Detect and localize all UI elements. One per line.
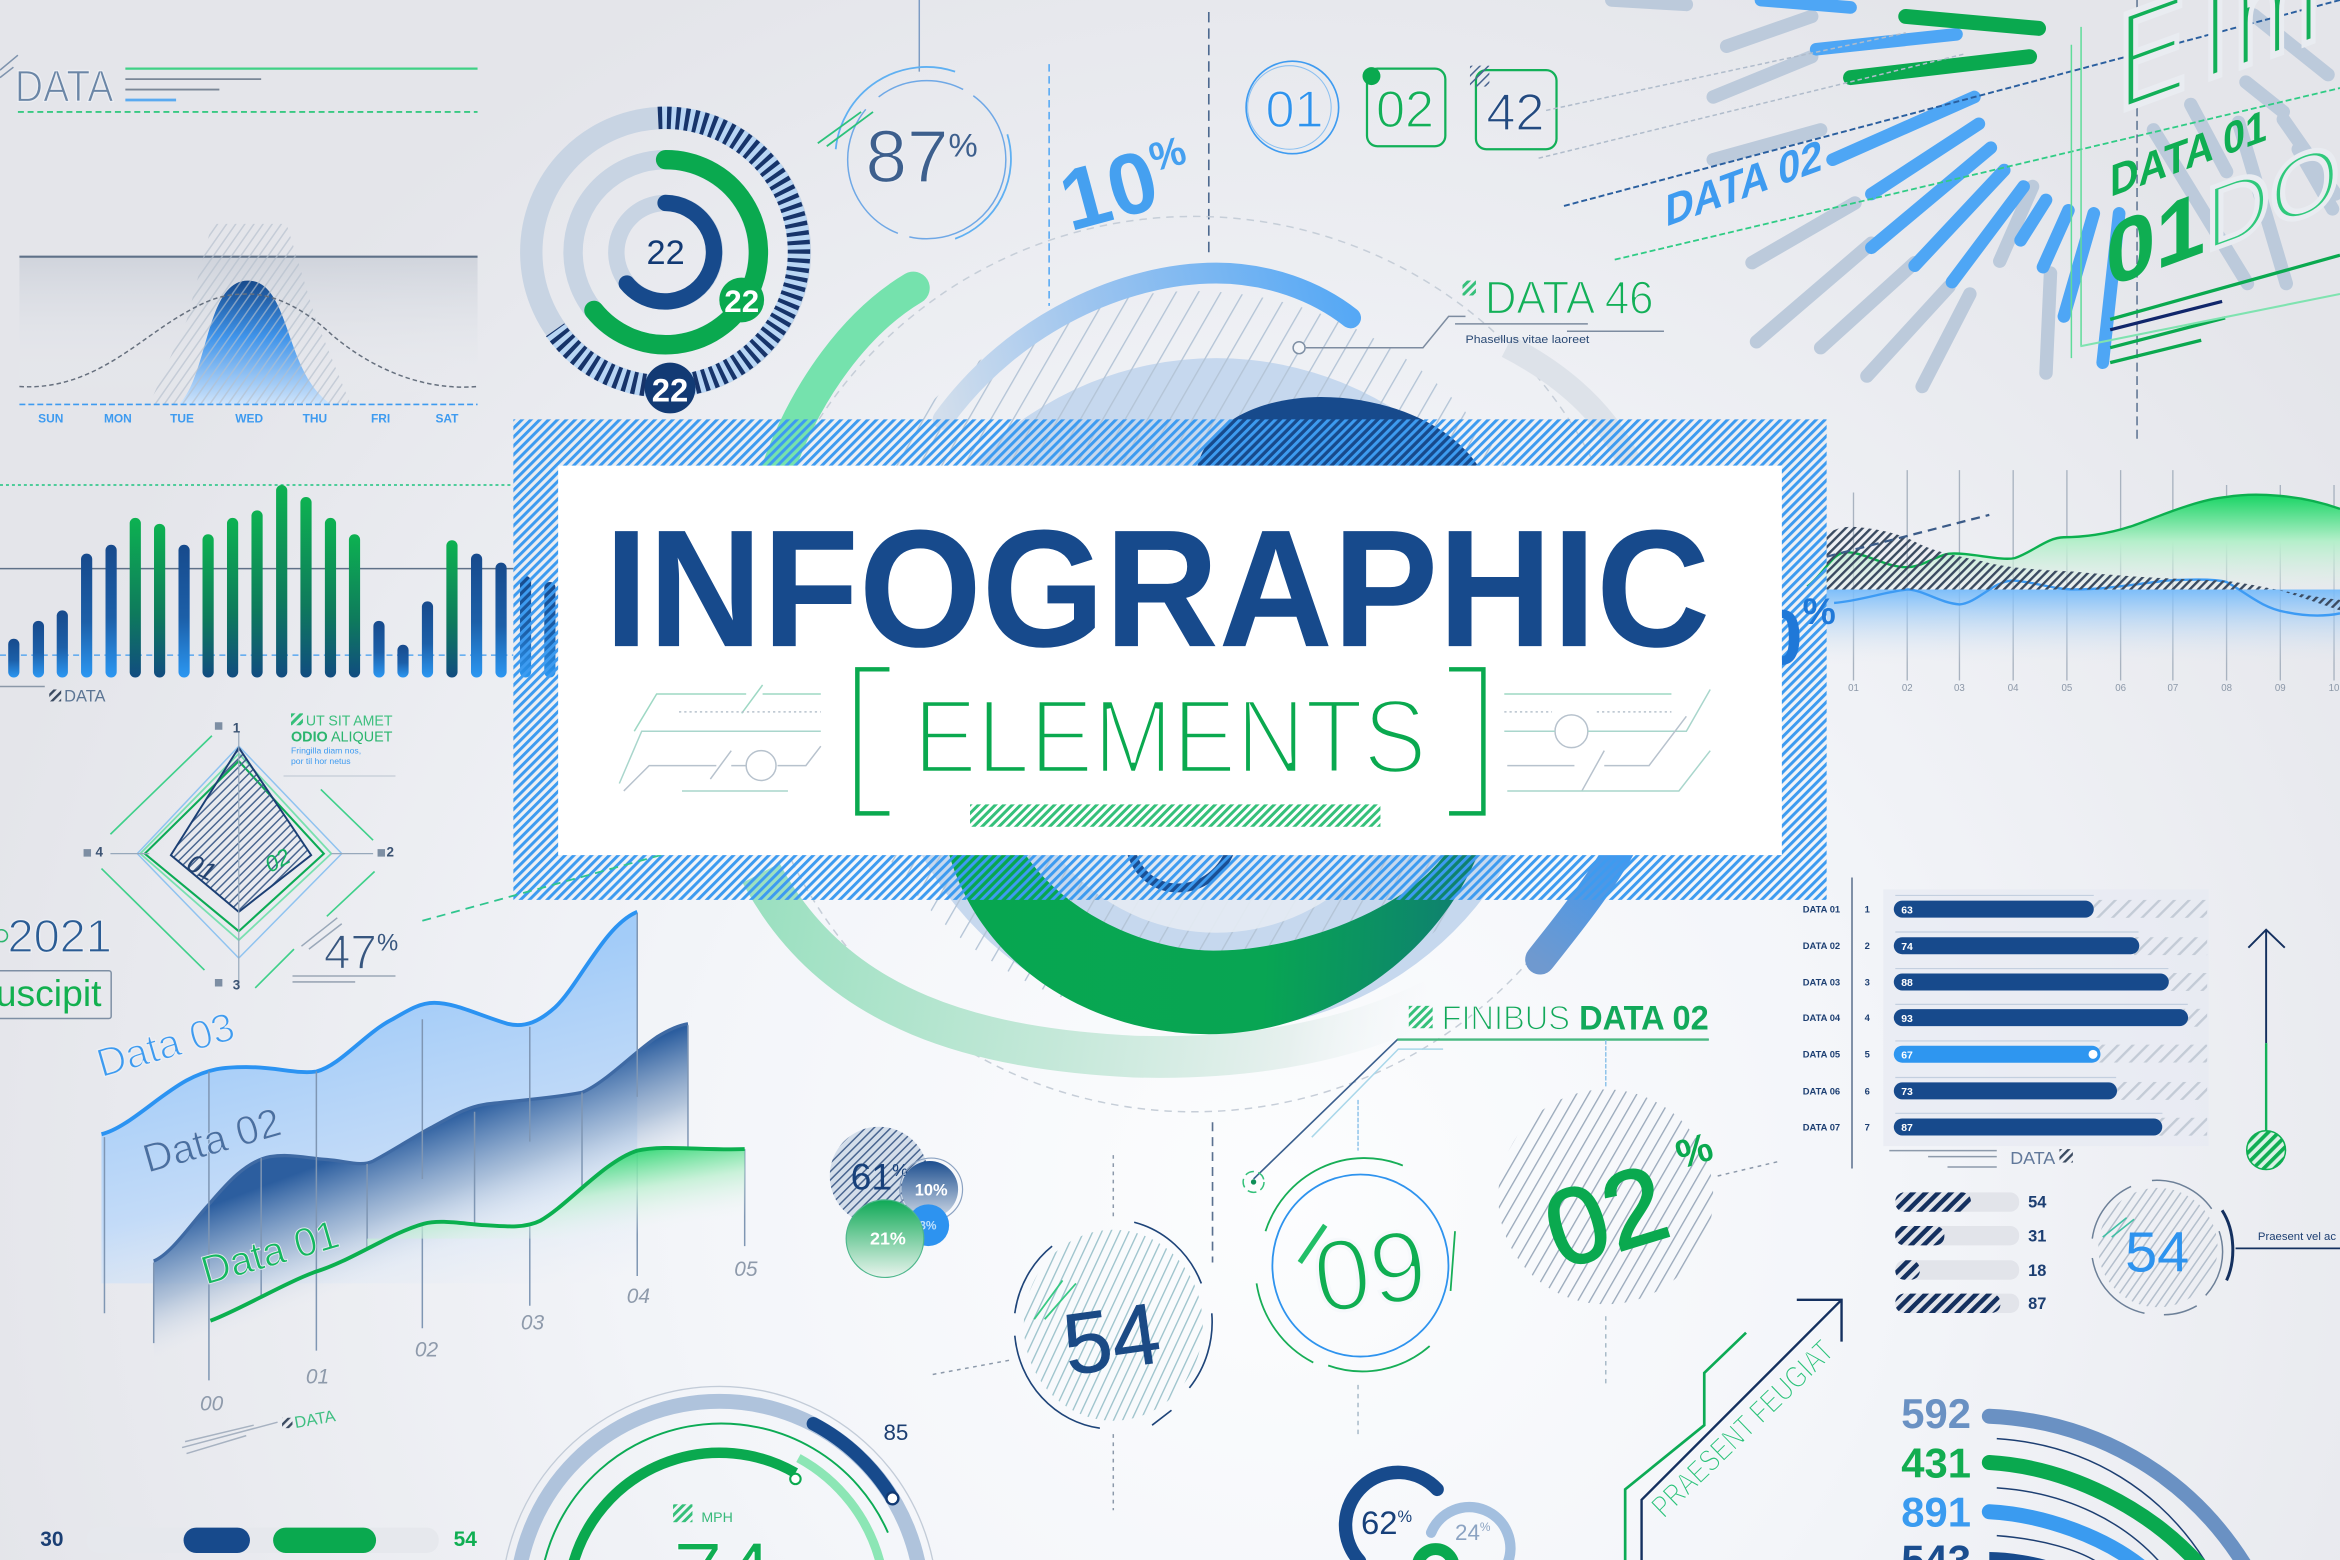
angled callout: PRAESENT FEUGIAT xyxy=(1625,1300,1842,1560)
right line chart: 03 xyxy=(1954,683,1965,694)
radar caption xyxy=(284,712,395,776)
area chart: 05 xyxy=(734,1258,758,1281)
bell chart: SUN xyxy=(38,411,63,425)
header: DATA xyxy=(0,55,478,112)
badge: 02 xyxy=(1363,67,1445,146)
header: DATA: DATA xyxy=(15,61,114,111)
right line chart: 02 xyxy=(1902,683,1913,694)
title panel xyxy=(558,466,1782,855)
bell chart: WED xyxy=(235,411,264,425)
radar caption: ODIO ALIQUET xyxy=(291,729,392,746)
series: Data 01 xyxy=(210,1148,745,1321)
radar chart: 01 xyxy=(182,849,220,887)
radar chart: 4 xyxy=(96,845,104,860)
horizontal bar list: DATA xyxy=(2010,1148,2055,1168)
circuit decoration left xyxy=(619,685,821,791)
dashed diagonals xyxy=(1539,0,2340,440)
radar chart: 1 xyxy=(233,721,241,736)
badge: 01 xyxy=(1246,61,1339,154)
bell chart: SAT xyxy=(435,411,459,425)
quarter arc list xyxy=(1901,1390,2246,1560)
right line chart: 05 xyxy=(2062,683,2072,694)
row 7: 87 xyxy=(1901,1123,1913,1134)
stat: 47%: 47 xyxy=(324,927,377,980)
arc: navy inner xyxy=(1130,843,1233,888)
right line chart: 01 xyxy=(1848,683,1859,694)
hatched progress bars xyxy=(1895,1192,2047,1313)
row 7: DATA 07 xyxy=(1803,1121,1840,1132)
circle stat: 02% xyxy=(1498,1089,1718,1304)
donut chart 22: 22 xyxy=(647,234,685,272)
bubble cluster xyxy=(830,1127,963,1277)
dashed ring xyxy=(746,216,1642,1112)
row 2: DATA 02 xyxy=(1803,940,1840,951)
arrow up with green stem xyxy=(2247,930,2286,1170)
radar caption: por til hor netus xyxy=(291,756,351,766)
small donuts xyxy=(1346,1472,1510,1560)
hatched progress bars: 31 xyxy=(2028,1228,2046,1246)
radar chart: 2 xyxy=(387,845,394,860)
circuit decoration right xyxy=(1504,689,1710,791)
stat: 87% xyxy=(818,0,1011,239)
central circular graphic xyxy=(746,216,1642,1112)
stat: 2021: 2021 xyxy=(7,910,112,962)
row 4: 4 xyxy=(1865,1012,1871,1023)
label: DATA 02: DATA 02 xyxy=(1665,129,1822,237)
right line chart: 09 xyxy=(2275,683,2286,694)
bar chart: DATA xyxy=(64,687,106,705)
area chart xyxy=(92,912,758,1433)
bubble cluster: 21% xyxy=(870,1229,906,1249)
small donuts: 24 xyxy=(1455,1520,1480,1545)
bar chart xyxy=(0,485,555,705)
area chart: 04 xyxy=(627,1285,650,1308)
dashed guides xyxy=(1048,64,1050,306)
range bar xyxy=(40,1528,477,1553)
right line chart: 08 xyxy=(2221,683,2232,694)
angled callout: PRAESENT FEUGIAT: PRAESENT FEUGIAT xyxy=(1645,1333,1841,1524)
legend: DATA: DATA xyxy=(293,1407,337,1432)
row 5: 67 xyxy=(1901,1050,1913,1061)
arc: top blue xyxy=(943,273,1351,419)
bubble cluster: 10% xyxy=(915,1181,948,1199)
radar caption: Fringilla diam nos, xyxy=(291,746,361,756)
bell peak area xyxy=(179,281,331,404)
callout: FINIBUS DATA 02: FINIBUS DATA 02 xyxy=(1442,1000,1709,1038)
area chart: Data 03 xyxy=(92,1004,240,1086)
badge: 01: 01 xyxy=(1266,81,1324,139)
bell chart: THU xyxy=(303,411,327,425)
badge: 42 xyxy=(1470,66,1557,149)
range bar: 30 xyxy=(40,1528,64,1551)
legend: DATA xyxy=(182,1407,337,1454)
crescent: green xyxy=(945,836,1485,1034)
series: Data 02 xyxy=(154,1024,688,1433)
bell chart: MON xyxy=(104,411,132,425)
bubble cluster: 8% xyxy=(919,1219,937,1233)
bell chart: FRI xyxy=(371,411,390,425)
row 7 xyxy=(1803,1113,2207,1136)
sunburst rays xyxy=(1612,0,2336,387)
quarter arc list: 431 xyxy=(1901,1439,1971,1486)
series: blue area xyxy=(1827,580,2340,664)
badge: 42: 42 xyxy=(1486,84,1544,142)
donut chart 22 xyxy=(531,118,800,413)
circle stat: 54 blue: Praesent vel ac xyxy=(2258,1231,2336,1243)
range bar: 54 xyxy=(454,1528,477,1551)
stat: 87%: % xyxy=(949,127,978,164)
small donuts: % xyxy=(1398,1508,1412,1526)
area chart: 02 xyxy=(415,1339,438,1362)
cropped stat behind frame: 0 xyxy=(1759,595,1803,681)
row 5: DATA 05 xyxy=(1803,1049,1840,1060)
row 4 xyxy=(1803,1004,2207,1027)
row 1: 63 xyxy=(1901,905,1913,916)
donut chart 22: 22 xyxy=(652,371,688,408)
small donuts: 62 xyxy=(1361,1504,1398,1541)
stat: 87%: 87 xyxy=(866,114,949,198)
bubble cluster: % xyxy=(892,1160,908,1180)
hatched frame xyxy=(513,419,1827,900)
row 1 xyxy=(1803,895,2207,918)
right line chart: 10 xyxy=(2329,683,2340,694)
area chart: Data 02 xyxy=(138,1099,286,1182)
callout: DATA 46 xyxy=(1293,271,1664,354)
hatched underline xyxy=(970,804,1380,827)
row 3: 3 xyxy=(1865,976,1870,987)
row 6 xyxy=(1803,1077,2207,1100)
hatched progress bars: 54 xyxy=(2028,1193,2047,1211)
badge: 02: 02 xyxy=(1376,81,1434,139)
subtitle: ELEMENTS: ELEMENTS xyxy=(913,678,1427,796)
circle stat: 02%: % xyxy=(1671,1124,1718,1178)
right line chart: 04 xyxy=(2008,683,2019,694)
circle stat: 02%: 02 xyxy=(1531,1142,1681,1291)
circle stat: 09: 09 xyxy=(1306,1207,1434,1335)
area chart: 00 xyxy=(200,1392,224,1415)
bell chart: TUE xyxy=(170,411,194,425)
hatched disc xyxy=(828,291,1560,1022)
arc: green upper xyxy=(776,288,913,475)
row 7: 7 xyxy=(1865,1121,1870,1132)
gauge: MPH xyxy=(701,1510,733,1526)
bell chart xyxy=(19,224,478,425)
row 4: 93 xyxy=(1901,1014,1913,1025)
row 5: 5 xyxy=(1865,1049,1870,1060)
stat: 10%: 10 xyxy=(1050,132,1168,250)
bubble cluster: 61 xyxy=(851,1155,892,1197)
pale blue disc xyxy=(880,358,1552,1030)
circle stat: 09 xyxy=(1257,1158,1455,1371)
crescent: navy xyxy=(1195,397,1485,478)
row 3: 88 xyxy=(1901,978,1913,989)
row 6: 6 xyxy=(1865,1085,1870,1096)
circle stat: 54 blue: 54 xyxy=(2125,1221,2189,1284)
gauge: 85 xyxy=(883,1420,908,1445)
cropped stat behind frame: % xyxy=(1803,590,1836,632)
dashed link xyxy=(422,836,731,921)
row 6: DATA 06 xyxy=(1803,1085,1840,1096)
bracket right xyxy=(1449,669,1483,813)
callout: DATA 46: DATA 46 xyxy=(1485,271,1654,323)
title: INFOGRAPHIC: INFOGRAPHIC xyxy=(604,496,1710,682)
right line chart xyxy=(1807,470,2340,694)
arc: pale green lower xyxy=(761,873,1433,1057)
radar chart xyxy=(84,721,394,992)
row 2 xyxy=(1803,932,2207,955)
dotted guides lower xyxy=(1212,1122,1214,1263)
hatched progress bars: 18 xyxy=(2028,1262,2046,1280)
row 5 xyxy=(1803,1041,2207,1063)
pale inner disc xyxy=(1015,530,1418,933)
row 3 xyxy=(1803,969,2207,991)
label: DATA 01: DATA 01 xyxy=(2110,99,2267,207)
row 2: 2 xyxy=(1865,940,1870,951)
hatched progress bars: 87 xyxy=(2028,1295,2046,1313)
radar chart: 3 xyxy=(233,977,240,992)
bracket left xyxy=(857,669,889,813)
skewed green panel xyxy=(2071,0,2340,363)
stat: 10%: % xyxy=(1144,128,1191,180)
radar caption: UT SIT AMET xyxy=(306,712,392,729)
grid lines xyxy=(104,913,745,1380)
row 1: DATA 01 xyxy=(1803,904,1840,915)
stat: 47%: % xyxy=(377,930,398,957)
gauge xyxy=(501,1386,937,1560)
row 6: 73 xyxy=(1901,1087,1913,1098)
series: hatched band xyxy=(1827,527,2340,610)
series: green area xyxy=(1807,495,2340,589)
callout: FINIBUS DATA 02 xyxy=(1243,1000,1709,1192)
arc: blue right xyxy=(1540,836,1627,960)
right line chart: 07 xyxy=(2167,683,2178,694)
area chart: Data 01 xyxy=(196,1211,344,1294)
bell hatch overlay xyxy=(149,224,351,404)
circle stat: 54 navy xyxy=(1015,1222,1212,1428)
radar chart: 02 xyxy=(261,843,295,877)
right line chart: 06 xyxy=(2115,683,2126,694)
donut chart 22: 22 xyxy=(724,284,759,319)
series: Data 03 xyxy=(101,912,637,1283)
row 3: DATA 03 xyxy=(1803,976,1840,987)
circle stat: 54 navy: 54 xyxy=(1057,1285,1166,1394)
small donuts: % xyxy=(1480,1520,1491,1534)
row 2: 74 xyxy=(1901,942,1913,953)
area chart: 03 xyxy=(521,1312,544,1335)
grey ring segment xyxy=(1507,346,1630,463)
circle stat: 54 blue xyxy=(2092,1180,2340,1315)
row 1: 1 xyxy=(1865,904,1870,915)
quarter arc list: 592 xyxy=(1901,1390,1971,1437)
row 4: DATA 04 xyxy=(1803,1012,1841,1023)
callout: DATA 46: Phasellus vitae laoreet xyxy=(1465,334,1589,346)
stat: 47% xyxy=(292,918,398,982)
horizontal bar list xyxy=(1803,878,2209,1169)
area chart: 01 xyxy=(306,1365,329,1388)
quarter arc list: 891 xyxy=(1901,1489,1971,1536)
